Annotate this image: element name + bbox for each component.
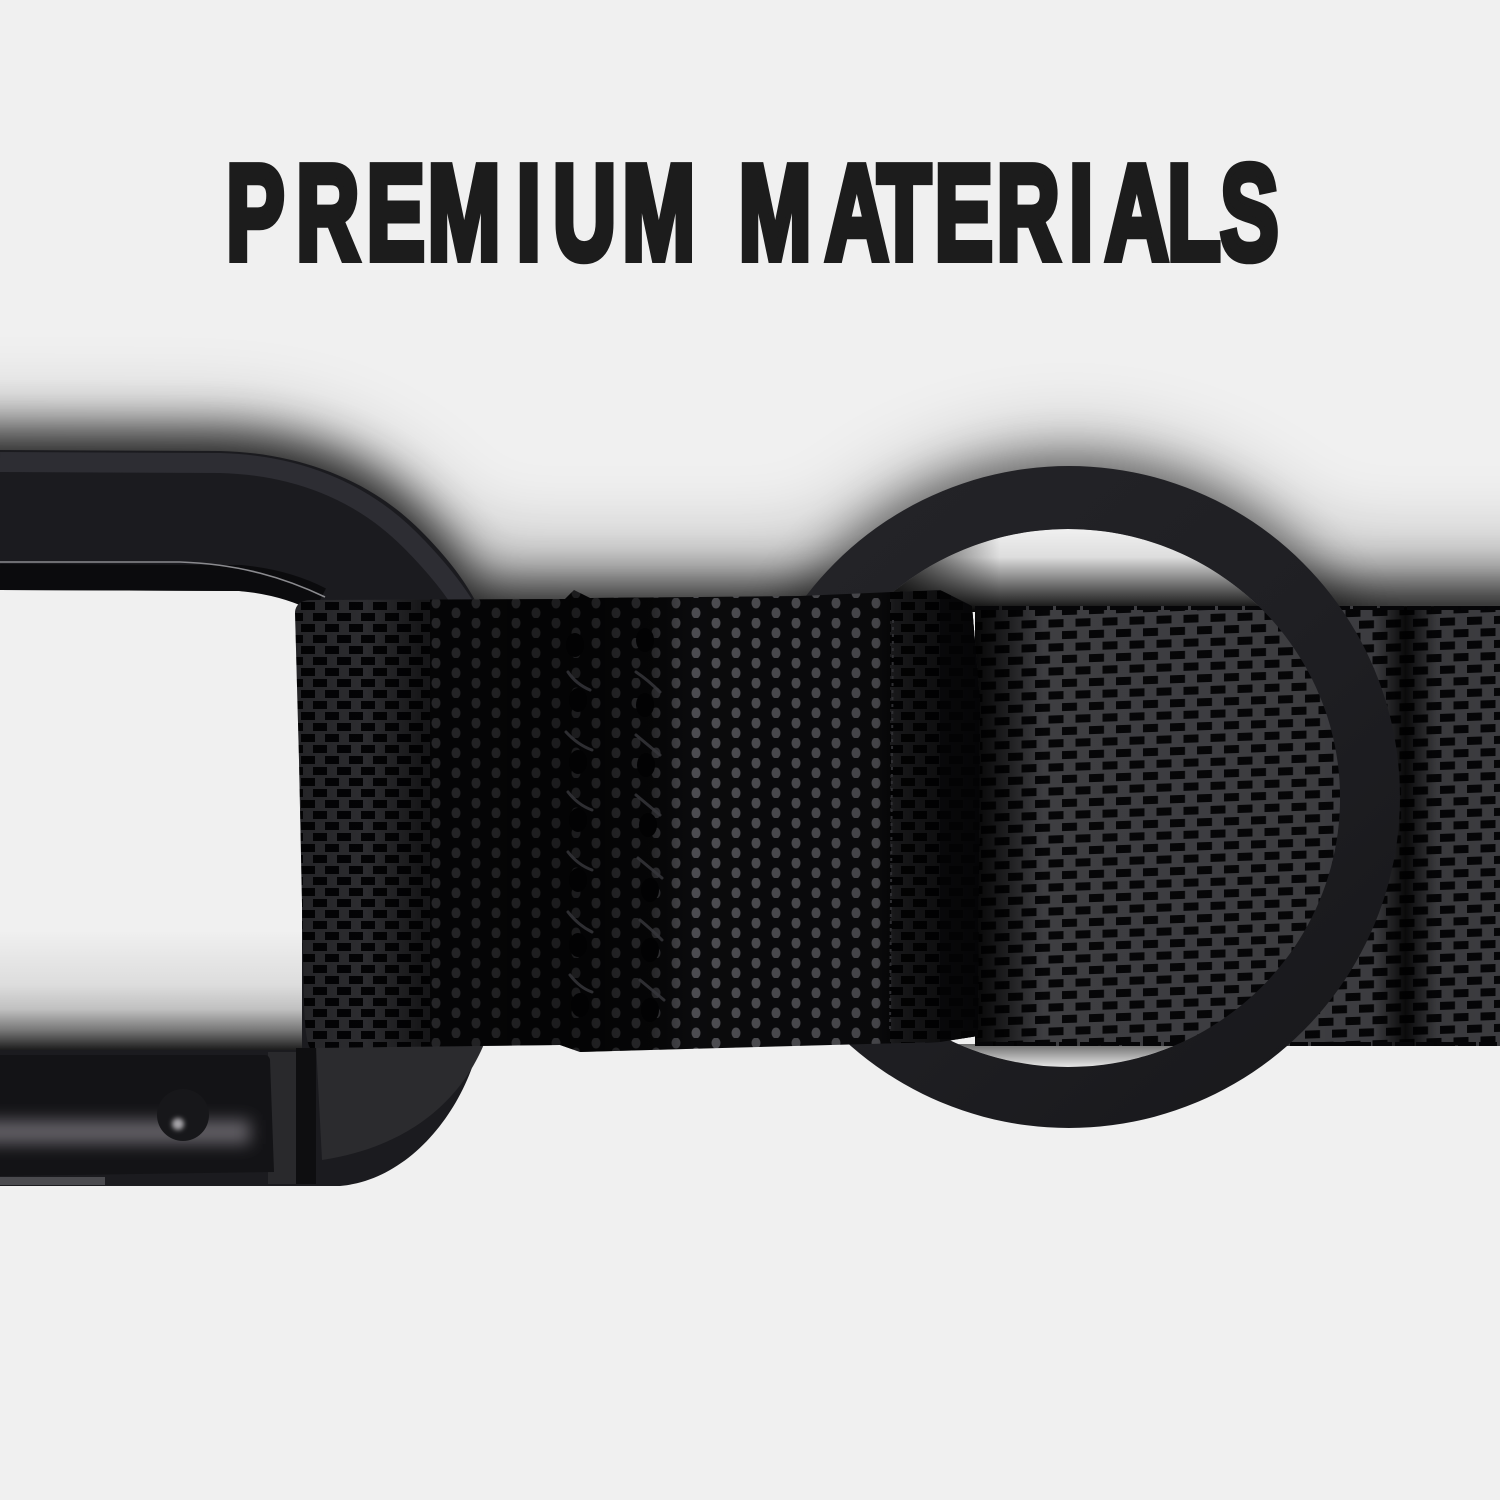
- dotted weave zone: [430, 585, 900, 1060]
- hem weave zone: [890, 585, 985, 1060]
- hem stitch line: [890, 620, 893, 1030]
- carabiner gate pin: [157, 1089, 209, 1141]
- carabiner outer rim highlight: [0, 462, 468, 612]
- carabiner gate seam: [296, 1048, 316, 1184]
- carabiner highlight line: [0, 562, 325, 597]
- gate lower sliver: [0, 1177, 105, 1185]
- title: PREMIUM MATERIALS: [226, 138, 1279, 289]
- ring interior background: [894, 529, 1258, 1067]
- carabiner gate lug: [268, 1052, 298, 1184]
- cast shadow above product: [0, 375, 1500, 606]
- webbing strap left stitched section: [290, 585, 985, 1060]
- stitching thread: [566, 672, 664, 1000]
- carabiner inner edge: [0, 577, 320, 600]
- shading overlay: [290, 585, 985, 1060]
- gate highlight band: [0, 1120, 250, 1144]
- carabiner gate barrel: [0, 1055, 274, 1176]
- wide soft shadow: [0, 375, 1500, 606]
- coarse weave zone: [295, 600, 430, 1048]
- tight core shadow: [0, 394, 1500, 606]
- webbing strap right section: [975, 606, 1500, 1046]
- o-ring: [738, 466, 1400, 1128]
- carabiner opening background: [0, 585, 305, 1055]
- carabiner body: [0, 450, 480, 1186]
- carabiner lower curved face: [316, 1044, 484, 1160]
- carabiner clip: [0, 450, 484, 1186]
- ring shadow: [778, 426, 1360, 606]
- stitching holes: [566, 628, 659, 1022]
- dark fold band: [940, 590, 975, 1040]
